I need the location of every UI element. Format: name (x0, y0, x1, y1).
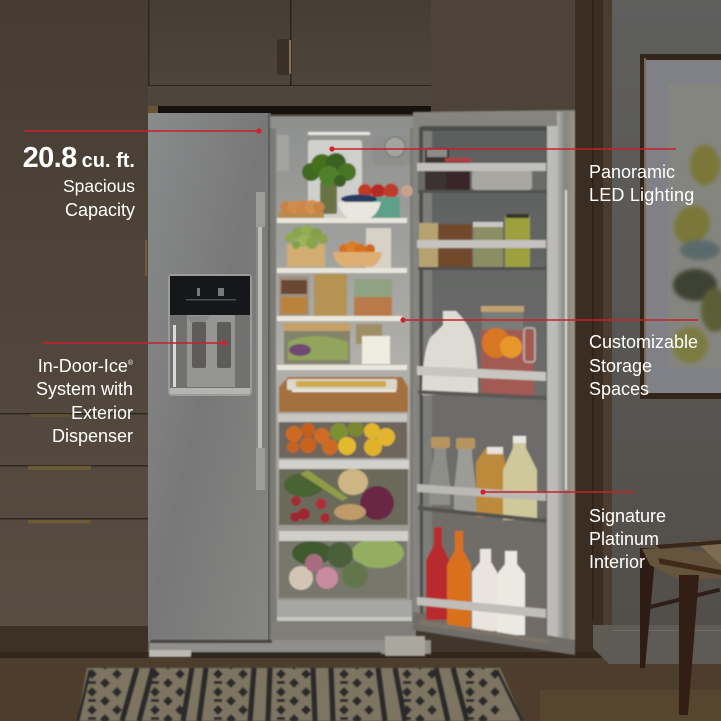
callout: LED lighting (329, 146, 694, 205)
storage label (589, 332, 698, 399)
capacity label: Spacious (63, 176, 135, 196)
bin 1: jars and tray (417, 148, 546, 193)
left wall cabinets (0, 0, 150, 652)
ice system label: Dispenser (52, 426, 133, 446)
LED lighting label (589, 162, 694, 205)
ice system label: In-Door-Ice (38, 356, 128, 376)
callout: storage (400, 317, 698, 399)
bin 5: bottles (417, 527, 548, 644)
storage label: Customizable (589, 332, 698, 352)
bin 4: carafes and juices (417, 436, 546, 523)
platinum interior label (589, 506, 666, 572)
platinum interior label: Interior (589, 552, 645, 572)
right cabinet and wall (575, 0, 721, 652)
freezer door (145, 113, 271, 641)
storage label: Storage (589, 356, 652, 376)
ice system label (36, 356, 134, 446)
callout: ice system (36, 340, 227, 446)
crisper: greens (279, 531, 408, 598)
bottom tray (270, 600, 416, 646)
capacity figure: 20.8cu. ft. (23, 142, 135, 174)
wooden tray with casserole (279, 377, 408, 412)
door handle (256, 192, 265, 490)
woven stool (640, 540, 721, 715)
framed painting (640, 54, 721, 399)
callout: platinum interior (480, 489, 666, 572)
platinum interior label: Signature (589, 506, 666, 526)
platinum interior label: Platinum (589, 529, 659, 549)
capacity label (63, 176, 135, 220)
third shelf with containers (277, 274, 402, 321)
ice and water dispenser (168, 274, 252, 396)
fourth shelf with salad bowl and takeout box (277, 323, 407, 370)
ice system label: Exterior (71, 403, 133, 423)
refrigerator interior (270, 116, 416, 646)
crisper: vegetables (279, 460, 409, 525)
ice system label: System with (36, 379, 133, 399)
refrigerator (145, 110, 575, 657)
open door with bins (413, 110, 575, 655)
storage label: Spaces (589, 379, 649, 399)
second shelf with grapes and bowl (277, 225, 407, 273)
wood floor (0, 652, 721, 721)
bottom kickplate (149, 636, 431, 657)
patterned rug (77, 668, 523, 721)
LED lighting label: LED Lighting (589, 185, 694, 205)
bin 2: jars and pickles (417, 214, 546, 270)
light panel and air unit (277, 132, 410, 220)
LED lighting label: Panoramic (589, 162, 675, 182)
top shelf with produce (277, 153, 413, 223)
bin 3: milk jug and citrus pitcher (417, 306, 546, 400)
callout: capacity (23, 128, 262, 220)
ice system label: ® (128, 359, 134, 367)
upper cabinets (148, 0, 575, 114)
baseboard (593, 625, 721, 664)
crisper: citrus (278, 414, 407, 458)
capacity label: Capacity (65, 200, 135, 220)
